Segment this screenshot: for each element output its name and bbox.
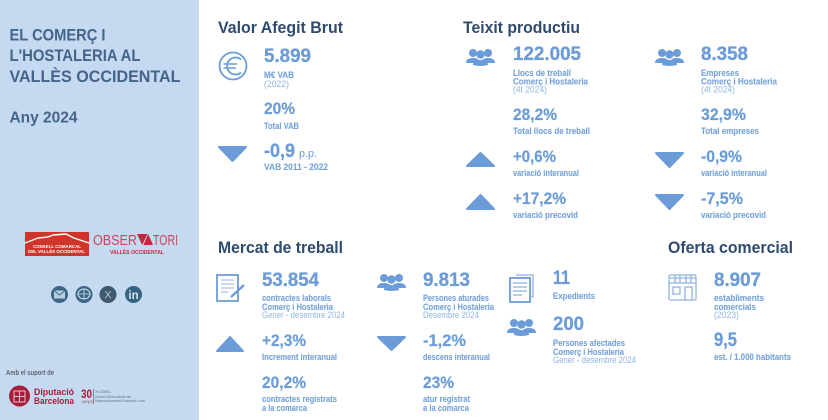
panel: Teixit productiu — [463, 18, 778, 220]
panel: Valor Afegit Brut — [218, 18, 343, 172]
stat: 122.005: Comerç i Hostaleria — [513, 76, 589, 86]
icon: people — [655, 49, 684, 66]
heading: Valor Afegit Brut — [218, 18, 343, 37]
logo: Observatori: VALLÈS OCCIDENTAL — [110, 248, 165, 256]
stat: 9,5: 9,5 — [714, 330, 737, 351]
icon: arrow down — [656, 153, 683, 167]
stat: -7,5%: -7,5% — [701, 189, 743, 208]
stat: 8.907: 8.907 — [714, 270, 761, 291]
stat: -0,9%: -0,9% — [701, 147, 742, 166]
title: L'HOSTALERIA AL — [10, 46, 140, 65]
stat: 122.005: 122.005 — [513, 44, 581, 65]
icon: people — [377, 274, 406, 291]
stat: 23%: a la comarca — [423, 403, 470, 413]
stat: 200: 200 — [553, 314, 584, 335]
stat: +17,2% — [513, 189, 578, 220]
stat: 122.005: Llocs de treball — [513, 68, 571, 78]
stat: 5.899: 5.899 — [264, 46, 311, 67]
stat: 8.358: (4t 2024) — [701, 84, 735, 94]
title: EL COMERÇ I — [10, 26, 106, 44]
stat: 5.899: (2022) — [264, 79, 289, 89]
logo: Consell Comarcal: DEL VALLÈS OCCIDENTAL — [28, 247, 85, 254]
logo: Diputació Barcelona — [9, 386, 75, 407]
stat: 20% — [264, 99, 299, 131]
icon: email — [51, 286, 68, 303]
stat: 32,9%: 32,9% — [701, 105, 746, 124]
logo: Observatori: OBSER — [93, 233, 137, 249]
stat: 20,2%: a la comarca — [262, 403, 308, 413]
stat: -1,2% — [423, 331, 490, 362]
stat: -0,9 p.p.: p.p. — [299, 148, 317, 160]
support label: Amb el suport de — [6, 370, 54, 377]
logo: XODEL 30 anys: anys — [82, 399, 94, 404]
logo: XODEL 30 anys — [81, 387, 145, 404]
stat: 9,5 — [714, 330, 791, 362]
title — [10, 26, 180, 86]
stat: 20%: 20% — [264, 99, 295, 118]
icon: LinkedIn: in — [128, 290, 139, 302]
stat: 5.899: M€ VAB — [264, 70, 294, 80]
stat: 9,5: est. / 1.000 habitants — [714, 352, 791, 362]
stat: 23%: 23% — [423, 373, 454, 392]
stat: -0,9 p.p. — [264, 141, 328, 172]
stat: 200: Gener - desembre 2024 — [553, 355, 636, 365]
stat: 122.005 — [513, 44, 589, 94]
logo: Observatori: TORI — [153, 233, 178, 249]
stat: 20,2% — [262, 373, 337, 413]
stat: 8.358: 8.358 — [701, 44, 748, 65]
stat: 8.907: comercials — [714, 302, 756, 312]
stat: -0,9 p.p.: -0,9 — [264, 141, 295, 162]
heading: Teixit productiu — [463, 18, 580, 37]
heading: Oferta comercial — [668, 238, 793, 257]
stat: 9.813 — [423, 270, 495, 320]
stat: 122.005: (4t 2024) — [513, 84, 547, 94]
stat: 23%: atur registrat — [423, 394, 470, 404]
stat: 8.358: Comerç i Hostaleria — [701, 76, 778, 86]
stat: -7,5% — [701, 189, 766, 220]
stat: 53.854 — [262, 270, 345, 320]
stat: 200: Comerç i Hostaleria — [553, 347, 625, 357]
title: VALLÈS OCCIDENTAL — [10, 67, 180, 86]
stat: 9.813: Desembre 2024 — [423, 310, 479, 320]
icon: arrow down — [656, 195, 683, 209]
icon: arrow up — [467, 153, 494, 166]
stat: 53.854: Comerç i Hostaleria — [262, 302, 334, 312]
stat: 32,9%: Total empreses — [701, 126, 759, 136]
stat: 200: Persones afectades — [553, 338, 625, 348]
stat: +17,2%: +17,2% — [513, 189, 566, 208]
panel: Oferta comercial — [668, 238, 793, 362]
logo: Diputació Barcelona: Diputació — [34, 387, 74, 398]
icon: people — [507, 319, 536, 336]
stat: +2,3%: +2,3% — [262, 331, 306, 350]
logo: Consell Comarcal: CONSELL COMARCAL — [33, 244, 81, 249]
stat: 20,2%: contractes registrats — [262, 394, 337, 404]
stat: 28,2% — [513, 105, 590, 136]
logo: Observatori — [93, 233, 178, 256]
logo: Diputació Barcelona: Barcelona — [34, 396, 75, 407]
stat: +2,3% — [262, 331, 337, 362]
stat: 200 — [553, 314, 636, 365]
stat: 28,2%: 28,2% — [513, 105, 557, 124]
icon: arrow up — [467, 195, 494, 209]
stat: +0,6%: variació interanual — [513, 168, 579, 178]
stat: 11: Expedients — [553, 291, 595, 301]
stat: 20%: Total VAB — [264, 121, 299, 131]
stat: 9.813: Comerç i Hostaleria — [423, 302, 495, 312]
year: Any 2024 — [10, 110, 78, 126]
icon: arrow down — [219, 147, 246, 161]
stat: 8.358 — [701, 44, 778, 94]
stat: -1,2%: descens interanual — [423, 352, 490, 362]
logo: XODEL 30 anys: 30 — [81, 387, 92, 401]
stat: -7,5%: variació precovid — [701, 210, 766, 220]
stat: 53.854: 53.854 — [262, 270, 319, 291]
stat: 23% — [423, 373, 470, 413]
stat: 9.813: 9.813 — [423, 270, 470, 291]
icon: arrow up — [217, 337, 243, 351]
stat: -0,9% — [701, 147, 767, 178]
stat: +0,6%: +0,6% — [513, 147, 556, 166]
stat: +17,2%: variació precovid — [513, 210, 578, 220]
stat: 20,2%: 20,2% — [262, 373, 306, 392]
stat: -0,9%: variació interanual — [701, 168, 767, 178]
panel: sidebar — [0, 0, 199, 420]
stat: 53.854: contractes laborals — [262, 293, 331, 303]
stat: 28,2%: Total llocs de treball — [513, 126, 590, 136]
stat: +2,3%: Increment interanual — [262, 352, 337, 362]
stat: 8.907: establiments — [714, 293, 764, 303]
stat: 11 — [553, 268, 595, 301]
icon: documents — [510, 275, 533, 302]
icon: arrow down — [378, 337, 405, 350]
stat: 8.907: (2023) — [714, 310, 739, 320]
icon: people — [466, 49, 495, 66]
icon: euro — [220, 52, 246, 80]
logo: Consell Comarcal — [25, 232, 89, 256]
panel: Mercat de treball — [217, 238, 636, 413]
stat: 53.854: Gener - desembre 2024 — [262, 310, 345, 320]
stat: +0,6% — [513, 147, 579, 178]
stat: 5.899 — [264, 46, 311, 89]
logo: XODEL 30 anys: Xarxa d'Observatoris del — [95, 395, 131, 399]
heading: Mercat de treball — [218, 238, 343, 257]
stat: -1,2%: -1,2% — [423, 331, 466, 350]
stat: 8.907 — [714, 270, 764, 320]
stat: 9.813: Persones aturades — [423, 293, 489, 303]
icon: shop — [669, 275, 696, 300]
icon: X: X — [104, 290, 112, 302]
logo: XODEL 30 anys: Desenvolupament Econòmic Local — [95, 399, 145, 403]
stat: 11: 11 — [553, 268, 570, 289]
stat: 32,9% — [701, 105, 759, 136]
stat: 8.358: Empreses — [701, 68, 739, 78]
stat: -0,9 p.p.: VAB 2011 - 2022 — [264, 162, 328, 172]
logo: XODEL 30 anys: XODEL — [95, 389, 112, 394]
icon: contract — [217, 275, 244, 301]
icon: web — [76, 286, 92, 303]
social icons — [51, 286, 142, 303]
